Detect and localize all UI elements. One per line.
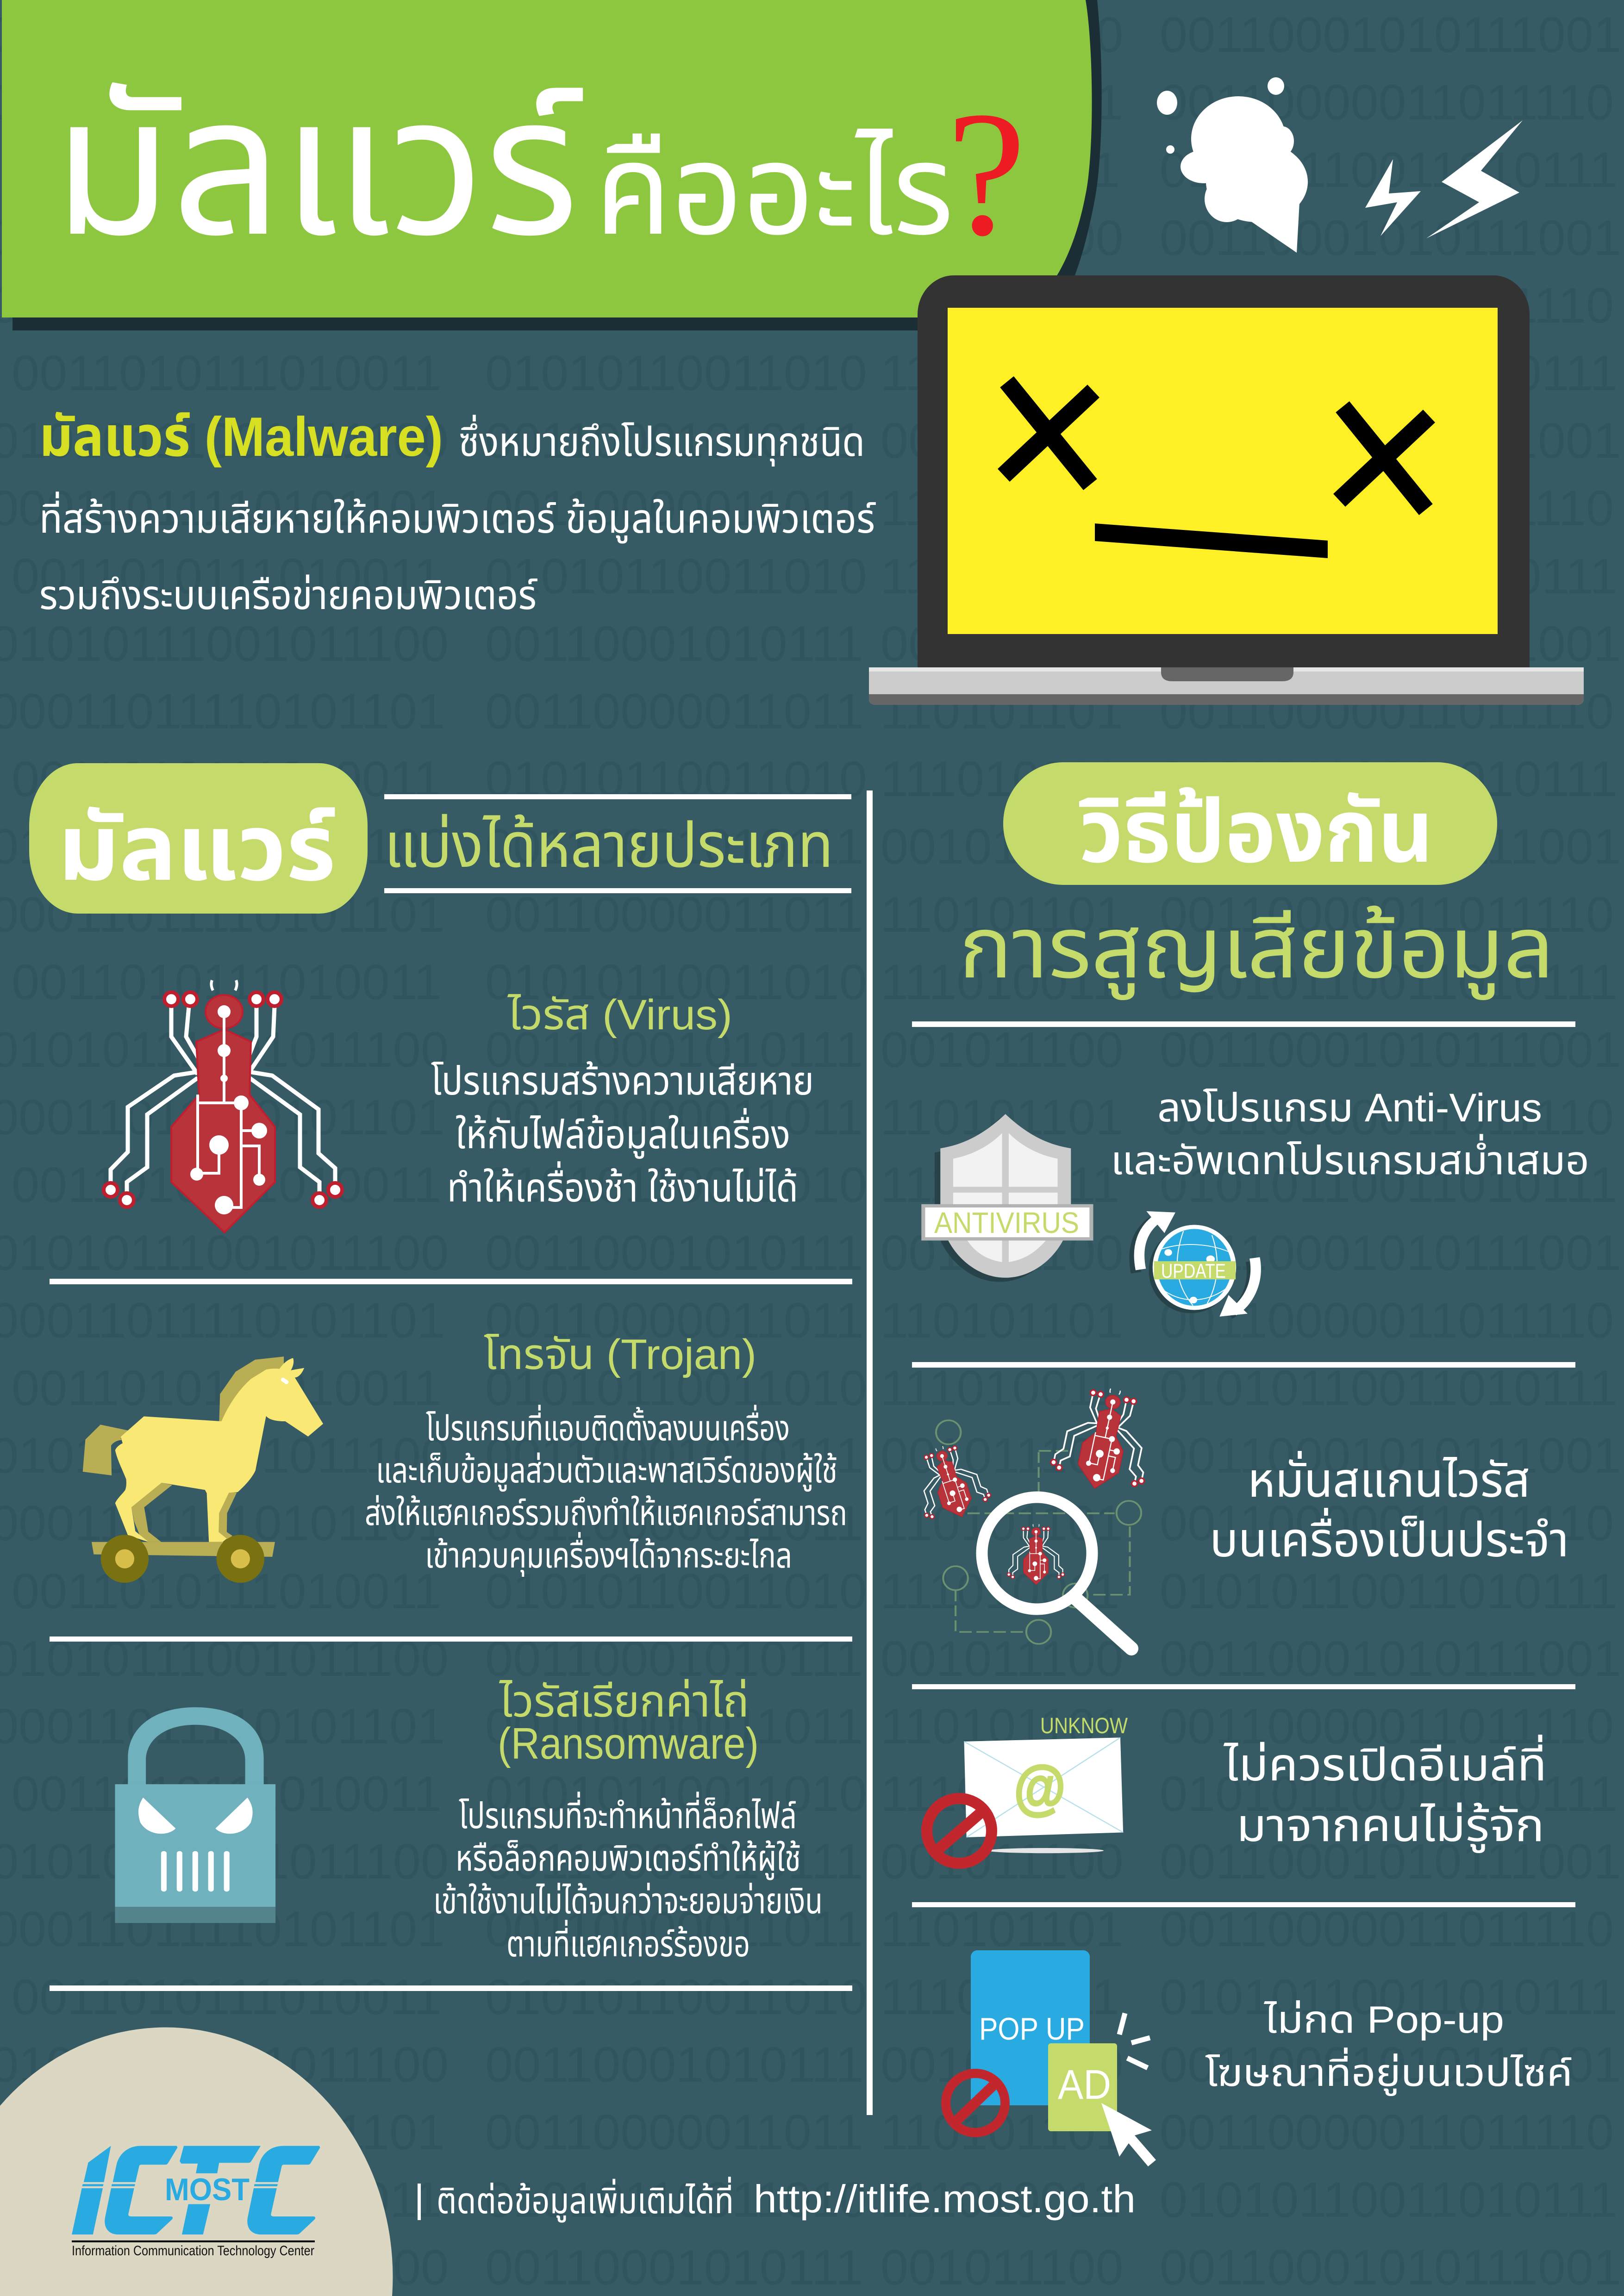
infographic canvas: 00011011110101101 (0, 1698, 445, 1754)
infographic canvas: 01010111001011100 (0, 1427, 449, 1483)
infographic canvas: 00011011110101101 (0, 74, 445, 130)
title text (53, 58, 1026, 275)
laptop base (869, 667, 1584, 705)
antivirus text: และอัพเดทโปรแกรมสม่ำเสมอ (1111, 1134, 1589, 1183)
infographic canvas: 111010011 (881, 2172, 1120, 2228)
infographic canvas: 00110001010111 (485, 1225, 863, 1281)
infographic canvas: 01010111001011100 (0, 412, 449, 468)
infographic canvas: 01010110011010 (485, 1563, 867, 1619)
infographic canvas: 110101101 (881, 683, 1124, 739)
infographic canvas: 01010110011010111 (1160, 548, 1618, 604)
infographic canvas: 0011010111010011 (12, 1969, 442, 2025)
infographic canvas: 0011010111010011 (12, 1360, 442, 1416)
infographic canvas: 00110001010111 (485, 1427, 863, 1483)
infographic canvas: 01010111001011100 (0, 1225, 449, 1281)
infographic canvas: 00110000011011 (485, 1901, 863, 1957)
virus text: โปรแกรมสร้างความเสียหาย (431, 1059, 814, 1103)
infographic canvas: 0011010111010011 (12, 954, 442, 1010)
infographic canvas: 001011100 (881, 1021, 1124, 1077)
infographic canvas: 01010110011010111 (1160, 751, 1618, 807)
infographic canvas: 00011011110101101 (0, 480, 445, 536)
infographic canvas: 00110000011011 (485, 1698, 863, 1754)
infographic canvas: 01010111001011100 (0, 1021, 449, 1077)
infographic canvas: 00110000011011110 (1160, 1495, 1614, 1551)
heading: malware types: แบ่งได้หลายประเภท (384, 810, 833, 880)
infographic canvas: 00011011110101101 (0, 277, 445, 333)
infographic canvas: 01010110011010111 (1160, 1563, 1618, 1619)
infographic canvas: 01010110011010111 (1160, 954, 1618, 1010)
infographic canvas: 110101101 (881, 277, 1124, 333)
icon: pop-up ad: POP UP (979, 2011, 1085, 2047)
infographic canvas: 001011100 (881, 1833, 1124, 1889)
infographic canvas: 01010111001011100 (0, 2239, 449, 2295)
title text: มัลแวร์ (53, 58, 585, 275)
ransomware text: ไวรัสเรียกค่าไถ่ (499, 1677, 749, 1726)
infographic canvas: 00110001010111 (485, 1833, 863, 1889)
virus text (431, 991, 814, 1210)
heading: malware types (29, 763, 851, 914)
infographic canvas: 00110001010111001 (1160, 210, 1621, 266)
logo badge (0, 2028, 393, 2296)
infographic canvas: 00110001010111001 (1160, 2036, 1621, 2092)
infographic canvas: 00110000011011110 (1160, 683, 1614, 739)
infographic canvas: 0011010111010011 (12, 1563, 442, 1619)
infographic canvas: 00110001010111001 (1160, 1225, 1621, 1281)
infographic canvas: 001011100 (881, 616, 1124, 672)
heading: prevention (959, 762, 1554, 1000)
infographic canvas: 0011010111010011 (12, 142, 442, 198)
heading: prevention: วิธีป้องกัน (1079, 783, 1433, 881)
intro text: รวมถึงระบบเครือข่ายคอมพิวเตอร์ (39, 572, 537, 618)
footer contact: ติดต่อข้อมูลเพิ่มเติมได้ที่ (437, 2177, 734, 2223)
infographic canvas: 110101101 (881, 1495, 1124, 1551)
infographic canvas: 01010110011010111 (1160, 142, 1618, 198)
panel: trojan (83, 1331, 847, 1583)
infographic canvas: 01010110011010111 (1160, 1157, 1618, 1213)
ransomware text: ตามที่แฮคเกอร์ร้องขอ (506, 1920, 750, 1964)
laptop with dizzy face (869, 275, 1584, 705)
infographic canvas: 01010110011010 (485, 142, 867, 198)
infographic canvas: 00110000011011110 (1160, 886, 1614, 942)
scan text: หมั่นสแกนไวรัส (1248, 1451, 1530, 1507)
panel: virus (104, 980, 814, 1232)
infographic canvas: 01010110011010 (485, 2172, 867, 2228)
icon: antivirus shield (921, 1114, 1093, 1282)
infographic canvas: 00110001010111 (485, 1630, 863, 1686)
intro text: ซึ่งหมายถึงโปรแกรมทุกชนิด (459, 415, 865, 467)
infographic canvas: 01010110011010 (485, 1969, 867, 2025)
infographic canvas: 001011100 (881, 1630, 1124, 1686)
panel: pop-up advice (946, 1950, 1573, 2166)
infographic canvas: 00110001010111 (485, 818, 863, 874)
panel: scan advice (906, 1380, 1569, 1649)
infographic canvas: 001011100 (881, 6, 1124, 62)
infographic canvas: 110101101 (881, 1901, 1124, 1957)
infographic canvas: 01010111001011100 (0, 818, 449, 874)
infographic canvas: 00110001010111001 (1160, 1021, 1621, 1077)
pop-up text: ไม่กด Pop-up (1263, 1999, 1504, 2041)
infographic canvas: 00110001010111001 (1160, 818, 1621, 874)
infographic canvas: 111010011 (881, 548, 1120, 604)
infographic canvas: 00110001010111 (485, 2036, 863, 2092)
infographic canvas: 110101101 (881, 2104, 1124, 2160)
infographic canvas: 001011100 (881, 412, 1124, 468)
infographic canvas: 00110000011011110 (1160, 277, 1614, 333)
trojan text (365, 1331, 847, 1577)
infographic canvas: 01010111001011100 (0, 1630, 449, 1686)
infographic canvas: 00011011110101101 (0, 1495, 445, 1551)
infographic canvas: 111010011 (881, 1766, 1120, 1822)
heading: malware types: มัลแวร์ (58, 796, 336, 900)
infographic canvas: 0011010111010011 (12, 345, 442, 401)
infographic canvas: 00110001010111 (485, 412, 863, 468)
infographic canvas: 0011010111010011 (12, 1766, 442, 1822)
infographic canvas: 00110001010111001 (1160, 412, 1621, 468)
logo: ICTC MOST: MOST (165, 2172, 250, 2207)
scan text (1210, 1451, 1569, 1567)
mouth (1095, 523, 1328, 558)
icon: unknown email: UNKNOW (1040, 1714, 1128, 1738)
email text (1223, 1735, 1547, 1853)
infographic canvas: 001011100 (881, 818, 1124, 874)
infographic canvas: 00110000011011110 (1160, 2104, 1614, 2160)
infographic canvas: 111010011 (881, 1563, 1120, 1619)
pop-up text (1205, 1999, 1573, 2096)
icon: speech cloud (1157, 77, 1308, 253)
infographic canvas: 00110000011011 (485, 1089, 863, 1145)
antivirus text: ลงโปรแกรม Anti-Virus (1157, 1086, 1542, 1130)
infographic canvas: 00011011110101101 (0, 2104, 445, 2160)
icon: update globe (1135, 1211, 1256, 1317)
intro text: มัลแวร์ (Malware) (39, 406, 443, 468)
infographic canvas: 00110001010111 (485, 616, 863, 672)
intro text: ที่สร้างความเสียหายให้คอมพิวเตอร์ ข้อมูลในคอมพิวเตอร์ (39, 492, 876, 543)
scan text: บนเครื่องเป็นประจำ (1210, 1508, 1569, 1567)
laptop screen (948, 308, 1498, 634)
infographic canvas: 001011100 (881, 2239, 1124, 2295)
infographic canvas: 001011100 (881, 210, 1124, 266)
infographic canvas: 001011100 (881, 1225, 1124, 1281)
icon: unknown email: @ (1014, 1753, 1066, 1821)
infographic canvas: 00110000011011 (485, 2104, 863, 2160)
title banner (2, 0, 1102, 330)
infographic canvas: 111010011 (881, 142, 1120, 198)
infographic canvas: 110101101 (881, 74, 1124, 130)
infographic canvas: 01010111001011100 (0, 1833, 449, 1889)
infographic canvas: 01010110011010 (485, 1766, 867, 1822)
icon: trojan horse (83, 1356, 323, 1583)
infographic canvas: 111010011 (881, 345, 1120, 401)
infographic canvas: 00110000011011110 (1160, 74, 1614, 130)
infographic canvas: 00110001010111001 (1160, 2239, 1621, 2295)
email text: มาจากคนไม่รู้จัก (1237, 1800, 1544, 1853)
icon: virus spider (104, 980, 342, 1232)
infographic canvas: 01010110011010 (485, 954, 867, 1010)
logo: ICTC MOST (72, 2146, 320, 2259)
infographic canvas: 111010011 (881, 954, 1120, 1010)
infographic canvas: 0011010111010011 (12, 548, 442, 604)
panel: email advice (927, 1714, 1547, 1863)
infographic canvas: 00110000011011 (485, 74, 863, 130)
footer contact: http://itlife.most.go.th (754, 2177, 1136, 2221)
infographic canvas: 111010011 (881, 751, 1120, 807)
infographic canvas: 00110001010111001 (1160, 1630, 1621, 1686)
icon: update globe: UPDATE (1161, 1260, 1226, 1282)
infographic canvas: 00110000011011 (485, 277, 863, 333)
virus text: ทำให้เครื่องช้า ใช้งานไม่ได้ (447, 1161, 798, 1210)
infographic canvas: 01010110011010 (485, 1157, 867, 1213)
virus text: ไวรัส (Virus) (507, 991, 732, 1039)
infographic canvas: 01010111001011100 (0, 210, 449, 266)
intro text (39, 406, 876, 618)
ransomware text: เข้าใช้งานไม่ได้จนกว่าจะยอมจ่ายเงิน (433, 1880, 823, 1921)
infographic canvas: 111010011 (881, 1969, 1120, 2025)
infographic canvas: 00011011110101101 (0, 683, 445, 739)
infographic canvas: 00110000011011 (485, 1495, 863, 1551)
antivirus text (1111, 1086, 1589, 1183)
infographic canvas: 110101101 (881, 1292, 1124, 1348)
infographic canvas: 01010110011010111 (1160, 1360, 1618, 1416)
infographic canvas: 01010110011010111 (1160, 1969, 1618, 2025)
icon: lightning bolts (1365, 120, 1523, 238)
title text: ? (947, 75, 1026, 273)
infographic canvas: 00110001010111001 (1160, 6, 1621, 62)
infographic canvas: 00110001010111001 (1160, 1427, 1621, 1483)
infographic canvas: 001011100 (881, 1427, 1124, 1483)
infographic canvas: 111010011 (881, 1360, 1120, 1416)
trojan text: โทรจัน (Trojan) (484, 1331, 756, 1378)
icon: skull padlock (115, 1707, 275, 1923)
icon: unknown email (927, 1714, 1128, 1863)
ransomware text: (Ransomware) (498, 1719, 759, 1768)
infographic canvas: 00110001010111 (485, 1021, 863, 1077)
infographic canvas: 0011010111010011 (12, 2172, 442, 2228)
infographic canvas: 110101101 (881, 1089, 1124, 1145)
icon: pop-up ad: AD (1058, 2062, 1111, 2108)
panel: ransomware (115, 1677, 823, 1964)
infographic canvas: 00011011110101101 (0, 1901, 445, 1957)
ransomware text (433, 1677, 823, 1964)
dizzy eyes (1004, 382, 1429, 510)
infographic canvas: 00011011110101101 (0, 1292, 445, 1348)
infographic canvas: 00110000011011 (485, 480, 863, 536)
trojan text: ส่งให้แฮคเกอร์รวมถึงทำให้แฮคเกอร์สามารถ (365, 1493, 847, 1533)
infographic canvas: 00110000011011 (485, 683, 863, 739)
infographic canvas: 01010110011010 (485, 751, 867, 807)
infographic canvas: 00110001010111001 (1160, 616, 1621, 672)
infographic canvas: 01010111001011100 (0, 2036, 449, 2092)
infographic canvas: 00110000011011110 (1160, 480, 1614, 536)
icon: pop-up ad (946, 1950, 1156, 2166)
panel: antivirus advice (921, 1086, 1589, 1317)
infographic canvas: 110101101 (881, 480, 1124, 536)
infographic canvas: 00011011110101101 (0, 886, 445, 942)
icon: magnifier scanning viruses (906, 1380, 1162, 1649)
trojan text: โปรแกรมที่แอบติดตั้งลงบนเครื่อง (426, 1405, 790, 1448)
infographic canvas: 01010110011010 (485, 548, 867, 604)
heading: prevention: การสูญเสียข้อมูล (959, 901, 1554, 1000)
infographic canvas: 0011010111010011 (12, 751, 442, 807)
infographic canvas: 00110000011011110 (1160, 1698, 1614, 1754)
footer contact (418, 2177, 1136, 2223)
virus text: ให้กับไฟล์ข้อมูลในเครื่อง (456, 1108, 790, 1159)
infographic canvas: 00110001010111 (485, 210, 863, 266)
infographic canvas: 01010110011010 (485, 345, 867, 401)
logo: ICTC MOST: Information Communication Technology Center (72, 2243, 314, 2259)
infographic canvas: 00110001010111 (485, 6, 863, 62)
trojan text: และเก็บข้อมูลส่วนตัวและพาสเวิร์ดของผู้ใช้ (376, 1451, 837, 1492)
infographic canvas: 00011011110101101 (0, 1089, 445, 1145)
infographic canvas: 01010110011010111 (1160, 2172, 1618, 2228)
icon: antivirus shield: ANTIVIRUS (934, 1206, 1079, 1239)
infographic canvas: 00110001010111001 (1160, 1833, 1621, 1889)
infographic canvas: 00110000011011 (485, 886, 863, 942)
infographic canvas: 110101101 (881, 886, 1124, 942)
infographic canvas: 00110000011011110 (1160, 1089, 1614, 1145)
email text: ไม่ควรเปิดอีเมล์ที่ (1223, 1735, 1547, 1790)
infographic canvas: 001011100 (881, 2036, 1124, 2092)
infographic canvas: 01010111001011100 (0, 6, 449, 62)
ransomware text: หรือล็อกคอมพิวเตอร์ทำให้ผู้ใช้ (456, 1838, 801, 1880)
ransomware text: โปรแกรมที่จะทำหน้าที่ล็อกไฟล์ (459, 1792, 797, 1836)
infographic canvas: 01010110011010 (485, 1360, 867, 1416)
infographic canvas: 00110000011011110 (1160, 1901, 1614, 1957)
trojan text: เข้าควบคุมเครื่องฯได้จากระยะไกล (425, 1532, 792, 1577)
title text: คืออะไร (595, 119, 954, 261)
infographic canvas: 01010111001011100 (0, 616, 449, 672)
pop-up text: โฆษณาที่อยู่บนเวปไซค์ (1205, 2047, 1573, 2096)
infographic canvas: 0011010111010011 (12, 1157, 442, 1213)
infographic canvas: 00110000011011110 (1160, 1292, 1614, 1348)
infographic canvas: 01010110011010111 (1160, 1766, 1618, 1822)
infographic canvas: 111010011 (881, 1157, 1120, 1213)
infographic canvas: 01010110011010111 (1160, 345, 1618, 401)
infographic canvas: 00110001010111 (485, 2239, 863, 2295)
infographic canvas: 00110000011011 (485, 1292, 863, 1348)
infographic canvas: 110101101 (881, 1698, 1124, 1754)
